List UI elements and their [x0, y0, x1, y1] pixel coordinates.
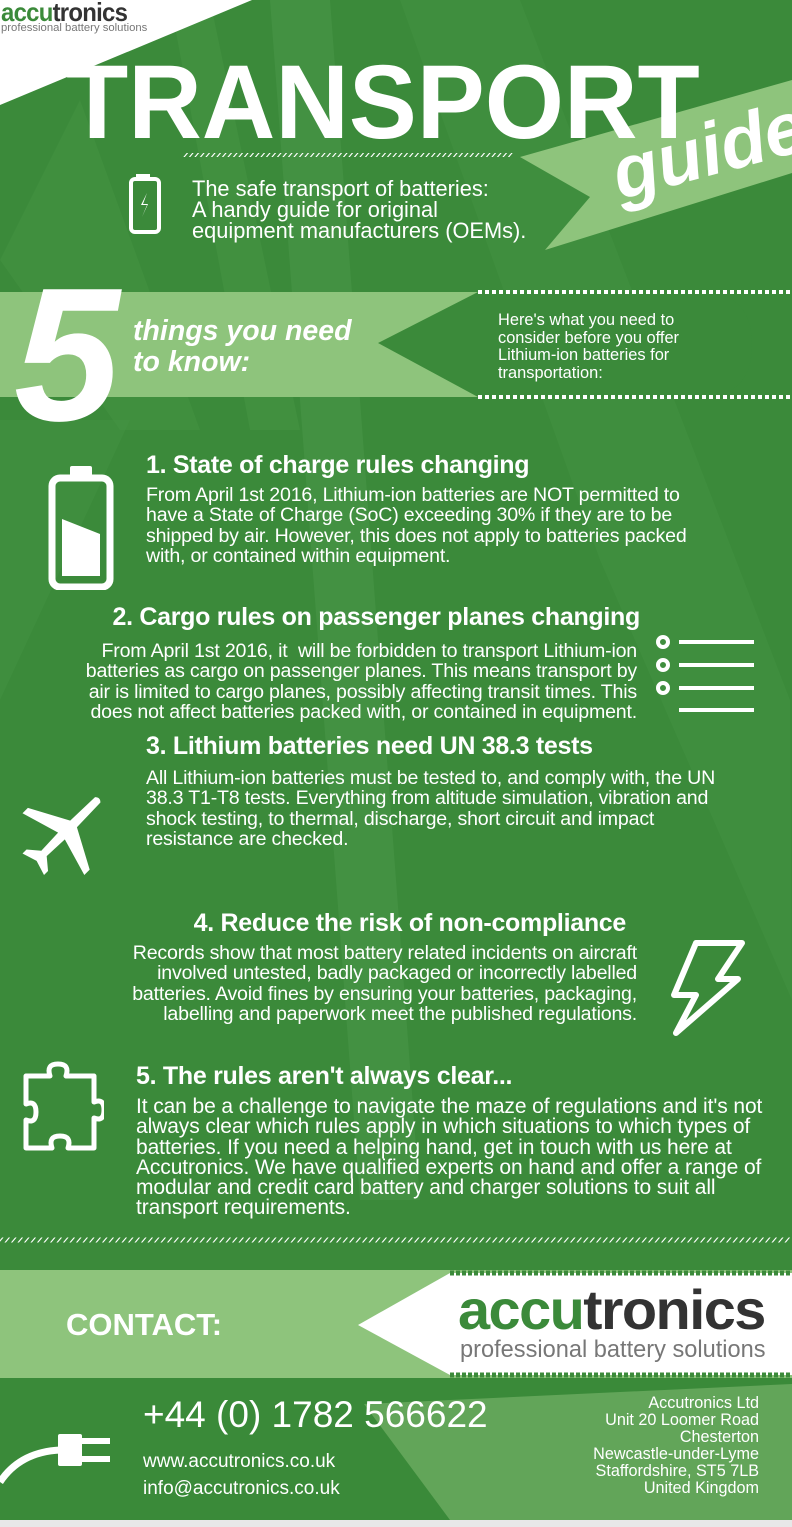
section 1: 1. State of charge rules changing [146, 451, 529, 479]
section 1: have a State of Charge (SoC) exceeding 30% if they are to be [146, 504, 672, 526]
section 1: shipped by air. However, this does not apply to batteries packed [146, 525, 687, 547]
band: 5 things: to know: [133, 346, 250, 378]
band: 5 things: transportation: [498, 364, 603, 382]
section 4: involved untested, badly packaged or incorrectly labelled [157, 962, 637, 984]
section 1: From April 1st 2016, Lithium-ion batteries are NOT permitted to [146, 484, 680, 506]
band: 5 things [0, 249, 790, 1144]
contact band [0, 1270, 792, 1378]
title: TRANSPORT [66, 44, 700, 161]
section 4: 4. Reduce the risk of non-compliance [194, 909, 626, 937]
section 3 [22, 732, 715, 875]
subtitle: equipment manufacturers (OEMs). [192, 218, 526, 243]
section 2: does not affect batteries packed with, or contained in equipment. [90, 701, 637, 723]
logo large: professional battery solutions [460, 1337, 766, 1363]
section 4: Records show that most battery related incidents on aircraft [133, 942, 637, 964]
section 5: 5. The rules aren't always clear... [136, 1062, 512, 1090]
section 1 [48, 451, 687, 590]
band: 5 things: 5 [14, 249, 120, 461]
logo top-left: professional battery solutions [1, 22, 147, 34]
bottom contact area: Staffordshire, ST5 7LB [596, 1462, 759, 1480]
bottom contact area: +44 (0) 1782 566622 [143, 1394, 488, 1435]
section 4 [132, 909, 745, 1036]
section 5: modular and credit card battery and charger solutions to suit all [136, 1176, 715, 1199]
section 5: always clear which rules apply in which situations to which types of [136, 1115, 750, 1138]
band: 5 things: Here's what you need to [498, 311, 674, 329]
bottom contact area: Accutronics Ltd [648, 1394, 759, 1412]
logo large: accutronics [458, 1278, 765, 1341]
section 2: air is limited to cargo planes, possibly affecting transit times. This [89, 681, 637, 703]
section 3: 38.3 T1-T8 tests. Everything from altitude simulation, vibration and [146, 787, 708, 809]
section 5: transport requirements. [136, 1196, 351, 1219]
icon: bolt [671, 940, 745, 1036]
bottom contact area: www.accutronics.co.uk [143, 1451, 335, 1472]
ribbon: guide [520, 80, 792, 250]
section 2: batteries as cargo on passenger planes. This means transport by [86, 660, 637, 682]
section 2: From April 1st 2016, it will be forbidden to transport Lithium-ion [102, 640, 637, 662]
section 2 [86, 603, 754, 723]
section 1: with, or contained within equipment. [146, 545, 450, 567]
bottom contact area: Chesterton [680, 1428, 759, 1446]
subtitle: A handy guide for original [192, 197, 438, 222]
bottom contact area: Newcastle-under-Lyme [593, 1445, 759, 1463]
bottom contact area: info@accutronics.co.uk [143, 1478, 340, 1499]
logo top-left [0, 0, 252, 105]
icon: plug [0, 1434, 110, 1484]
section 3: resistance are checked. [146, 828, 348, 850]
bottom contact area: United Kingdom [644, 1479, 759, 1497]
band: 5 things: consider before you offer [498, 328, 679, 346]
section 4: batteries. Avoid fines by ensuring your batteries, packaging, [132, 983, 637, 1005]
subtitle: The safe transport of batteries: [192, 176, 489, 201]
bottom contact area [0, 1384, 792, 1520]
band: 5 things: things you need [133, 315, 352, 347]
section 5: batteries. If you need a helping hand, get in touch with us here at [136, 1136, 732, 1159]
section 2: 2. Cargo rules on passenger planes changing [112, 603, 640, 631]
section 3: All Lithium-ion batteries must be tested to, and comply with, the UN [146, 767, 715, 789]
contact band: CONTACT: [66, 1307, 222, 1342]
section 5 [24, 1062, 762, 1219]
section 3: shock testing, to thermal, discharge, short circuit and impact [146, 808, 654, 830]
section 4: labelling and paperwork meet the published regulations. [163, 1003, 637, 1025]
band: 5 things: Lithium-ion batteries for [498, 346, 669, 364]
icon: list [656, 635, 754, 712]
subtitle [192, 176, 526, 243]
section 5: It can be a challenge to navigate the maze of regulations and it's not [136, 1095, 762, 1118]
section 5: Accutronics. We have qualified experts on hand and offer a range of [136, 1156, 761, 1179]
bottom contact area: Unit 20 Loomer Road [605, 1411, 759, 1429]
icon: battery small [129, 174, 161, 234]
section 3: 3. Lithium batteries need UN 38.3 tests [146, 732, 593, 760]
